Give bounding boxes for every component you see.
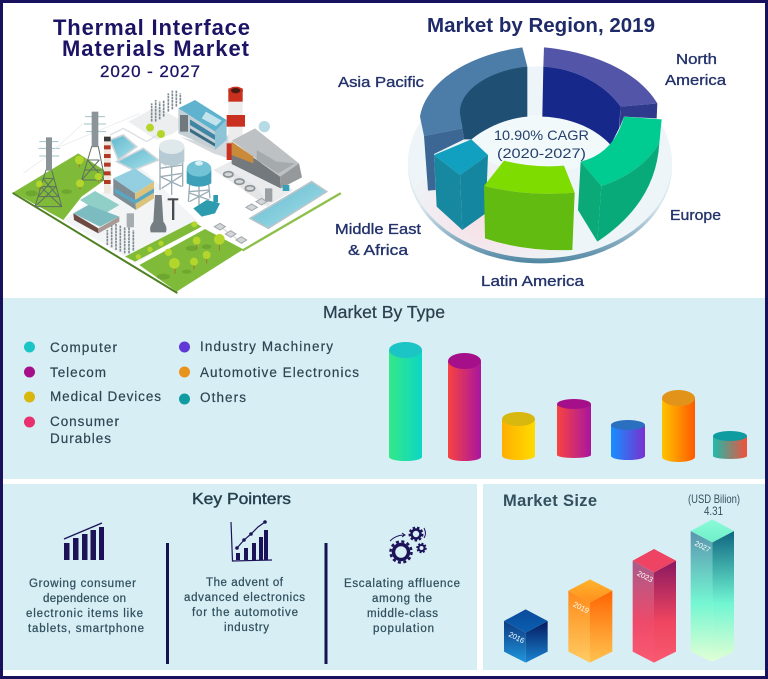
legend: Computer bbox=[50, 340, 118, 355]
value label: (USD Bilion) bbox=[688, 492, 740, 506]
small blue building bbox=[113, 168, 154, 210]
region labels: Middle East bbox=[335, 221, 422, 238]
value label: 4.31 bbox=[704, 504, 723, 518]
exhaust stack bbox=[127, 195, 178, 232]
bar year labels bbox=[507, 539, 712, 645]
red and white chimney bbox=[227, 87, 245, 160]
pylons bbox=[23, 113, 140, 207]
region labels: Europe bbox=[670, 207, 721, 224]
title: Thermal Interface bbox=[53, 15, 250, 40]
green lawn: left bbox=[13, 153, 112, 220]
region labels: America bbox=[665, 72, 727, 89]
text: point 1: electronic items like bbox=[26, 608, 143, 620]
gray factory bbox=[214, 121, 302, 243]
cylinder bar chart bbox=[389, 342, 747, 462]
heading: Market by Region: Market by Region, 2019 bbox=[427, 14, 655, 37]
text: point 3: population bbox=[373, 623, 434, 635]
value label bbox=[688, 492, 740, 518]
text: point 2: advanced electronics bbox=[184, 592, 305, 604]
heading: Key Pointers: Key Pointers bbox=[192, 491, 291, 508]
water towers bbox=[160, 160, 210, 205]
region labels: Latin America bbox=[481, 273, 585, 290]
heading: Market By Type: Market By Type bbox=[323, 302, 445, 322]
segment: Asia Pacific bbox=[420, 47, 527, 191]
text: point 3: middle-class bbox=[367, 608, 438, 620]
legend: Consumer bbox=[50, 414, 120, 429]
legend: Durables bbox=[50, 431, 111, 446]
panel: market size bbox=[483, 484, 765, 670]
isometric bar chart bbox=[504, 519, 734, 663]
text: point 3: Escalating affluence bbox=[344, 578, 460, 590]
panel: key pointers bbox=[3, 484, 477, 670]
CAGR label: 10.90% CAGR bbox=[494, 127, 589, 143]
text: point 2: industry bbox=[224, 622, 269, 634]
icon: rising bar chart bbox=[64, 523, 104, 560]
pools bbox=[110, 135, 158, 170]
bar: 2023 bbox=[633, 549, 676, 663]
bar: 2019 bbox=[568, 579, 612, 663]
legend: Industry Machinery bbox=[200, 339, 333, 354]
legend bbox=[24, 339, 359, 446]
text: point 2: The advent of bbox=[206, 577, 284, 589]
heading: Market Size: Market Size bbox=[503, 492, 597, 510]
bar year labels: 2023 bbox=[636, 569, 655, 584]
text: point 1: dependence on bbox=[43, 593, 126, 605]
text: point 3 bbox=[344, 578, 460, 635]
segment: Europe bbox=[578, 117, 662, 242]
legend: Others bbox=[200, 390, 246, 405]
donut chart: market by region bbox=[408, 47, 672, 263]
title: 2020 - 2027 bbox=[100, 62, 200, 81]
icon: gears bbox=[390, 528, 426, 562]
striped chimney bbox=[104, 137, 111, 193]
segment: North America bbox=[542, 47, 657, 145]
text: point 2: for the automotive bbox=[192, 607, 298, 619]
region labels: Asia Pacific bbox=[338, 74, 425, 91]
title bbox=[53, 15, 250, 81]
region labels bbox=[335, 51, 727, 290]
divider lines bbox=[166, 543, 328, 664]
illustration: isometric industrial plant bbox=[13, 87, 340, 293]
segment: Latin America bbox=[484, 161, 575, 250]
segment: Middle East and Africa bbox=[434, 139, 488, 230]
text: point 1: tablets, smartphone bbox=[28, 623, 144, 635]
legend: Telecom bbox=[50, 365, 106, 380]
text: point 3: among the bbox=[372, 593, 432, 605]
paved ground bbox=[63, 167, 200, 263]
bar: 2027 bbox=[691, 519, 734, 662]
region labels: North bbox=[676, 51, 717, 68]
trees and bushes bbox=[39, 161, 219, 274]
transformers bbox=[107, 90, 180, 253]
text: point 1 bbox=[26, 578, 144, 635]
text: point 1: Growing consumer bbox=[29, 578, 136, 590]
bar year labels: 2016 bbox=[507, 630, 526, 645]
title: Materials Market bbox=[62, 36, 250, 61]
CAGR label: (2020-2027) bbox=[497, 145, 586, 161]
warehouse bbox=[73, 191, 119, 233]
bar year labels: 2019 bbox=[572, 600, 591, 615]
panel: market by type bbox=[3, 298, 765, 479]
region labels: & Africa bbox=[348, 242, 409, 259]
legend: Automotive Electronics bbox=[200, 365, 359, 380]
bar: 2016 bbox=[504, 609, 548, 663]
blue office building bbox=[178, 100, 227, 150]
icon: line and bar graph bbox=[231, 520, 272, 561]
green lawn: bottom bbox=[139, 229, 243, 292]
legend: Medical Devices bbox=[50, 389, 161, 404]
text: point 2 bbox=[184, 577, 305, 634]
bar year labels: 2027 bbox=[693, 539, 712, 554]
CAGR label bbox=[494, 127, 589, 161]
